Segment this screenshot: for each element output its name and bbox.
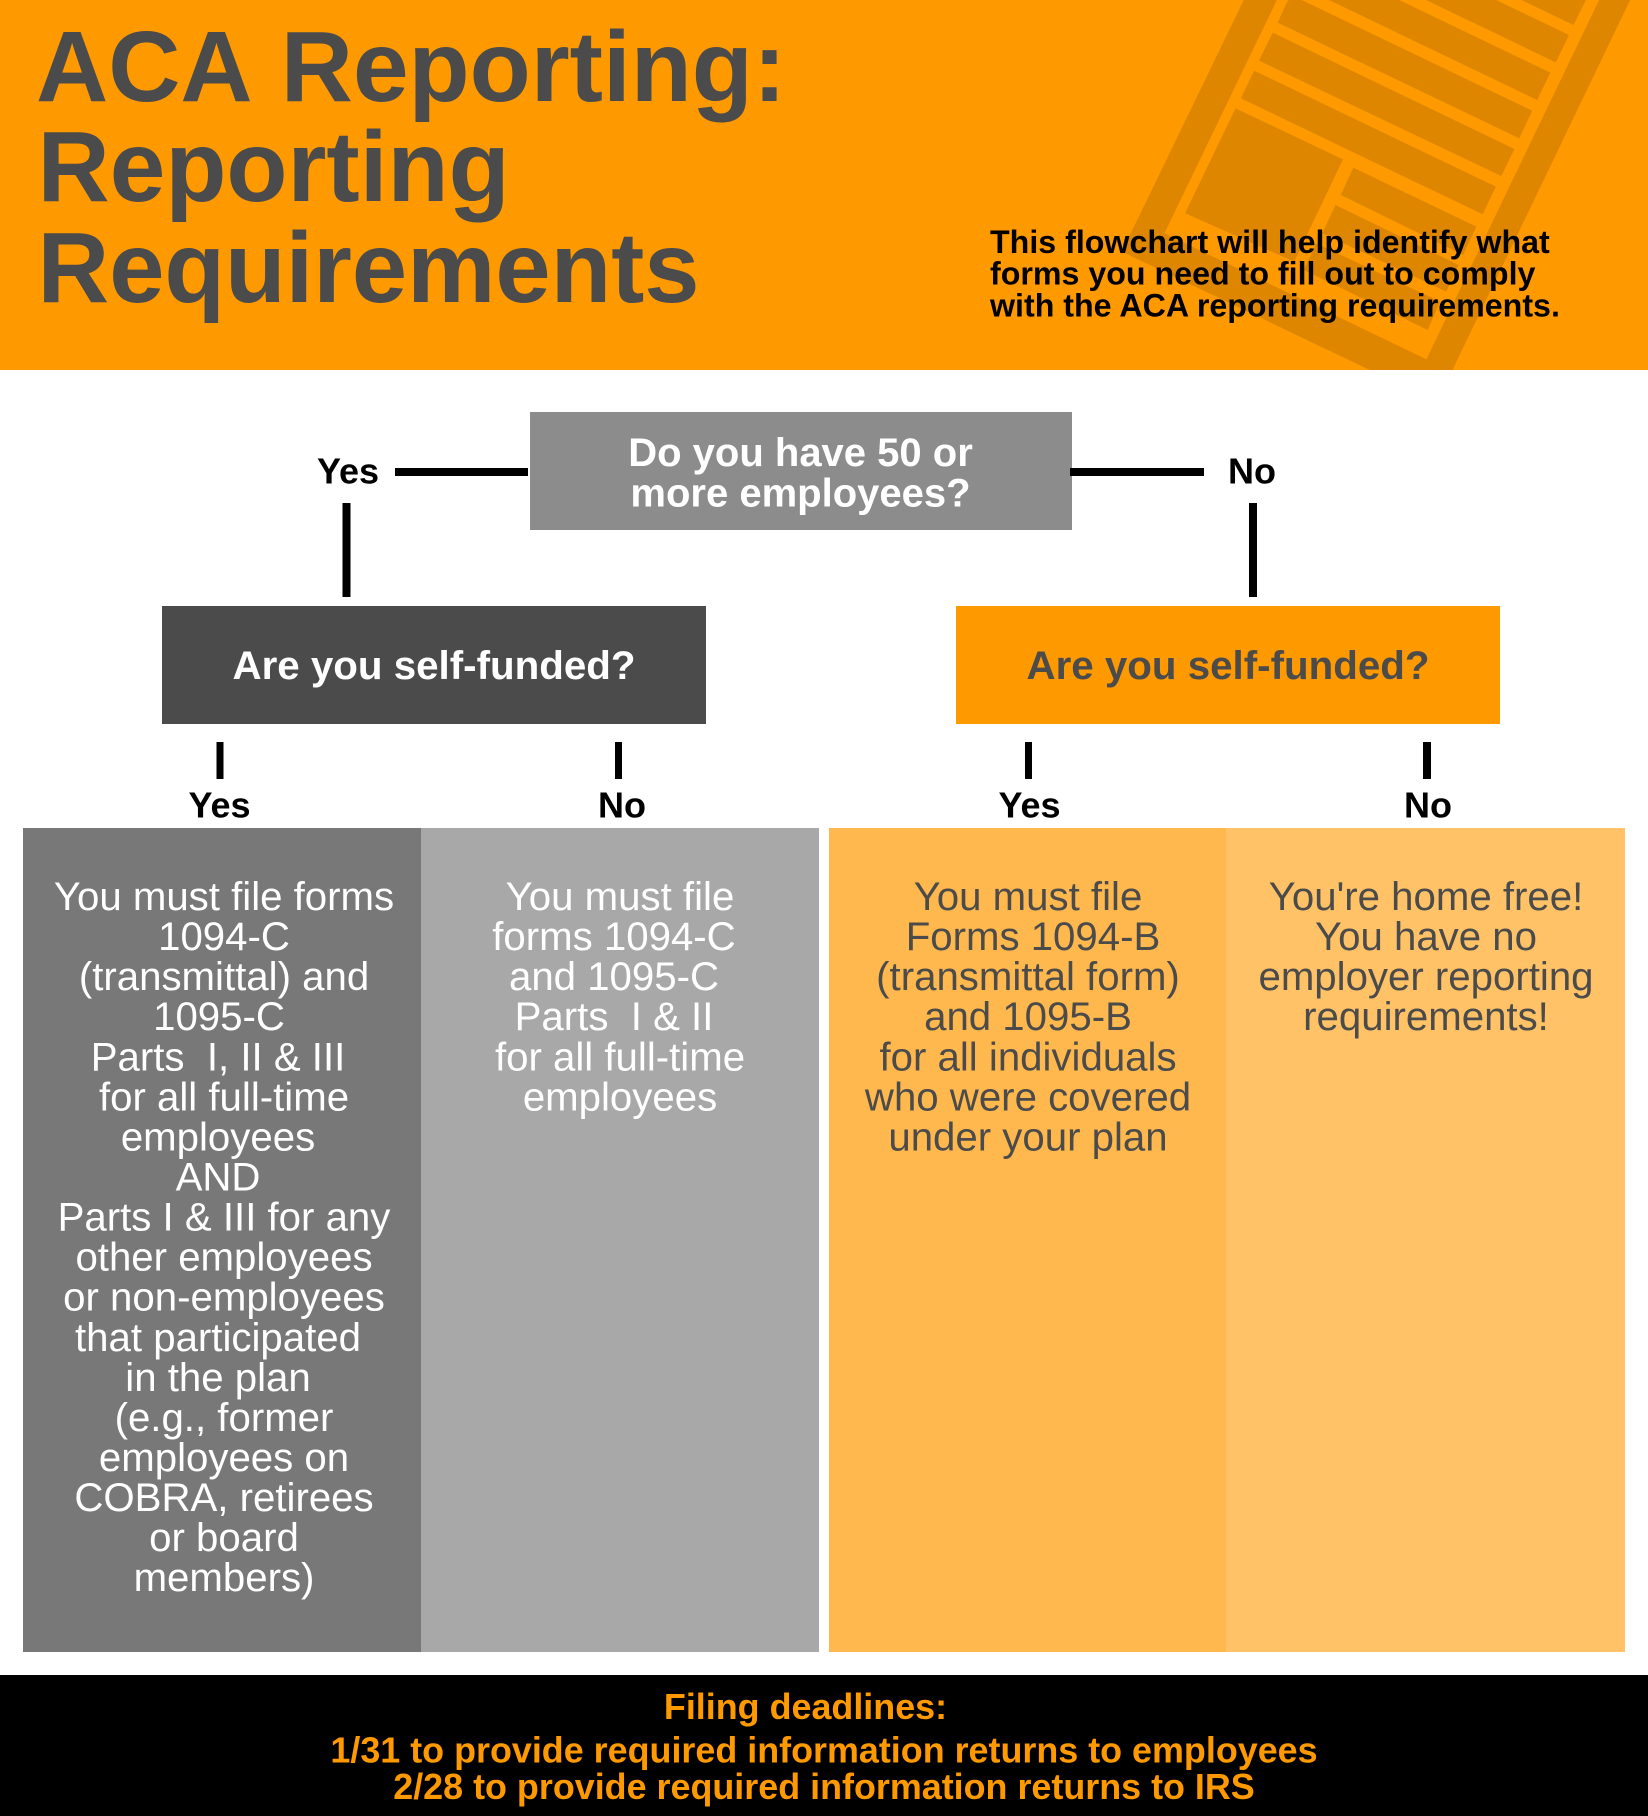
panel: self-funded large employer: 1095-C [153,994,285,1039]
icon: tilted document [1122,0,1630,370]
panel: not self-funded small employer: You're home free! [1269,874,1583,919]
intro text [989,224,1560,324]
panel: self-funded large employer: You must file forms [54,874,394,919]
panel: self-funded large employer: other employees [75,1235,373,1280]
title: Requirements [38,212,700,324]
panel: self-funded small employer: and 1095-B [924,994,1132,1039]
connector: left yes tick [216,742,224,779]
panel: self-funded large employer: employees on [99,1435,349,1480]
label: left Yes: Yes [188,784,251,826]
panel: self-funded small employer: for all individuals [879,1034,1177,1079]
question: self-funded, left [162,606,706,724]
panel: not self-funded large employer: You must file [506,874,734,919]
panel: self-funded small employer: who were covered [864,1074,1191,1119]
panel: self-funded large employer: employees [121,1114,315,1159]
panel: self-funded large employer: COBRA, retirees [74,1475,374,1520]
panel: not self-funded large employer: and 1095-C [509,954,719,999]
panel: not self-funded small employer: requirements! [1303,994,1549,1039]
label: right Yes: Yes [998,784,1061,826]
connector: right no tick [1423,742,1431,779]
question: 50 or more employees [530,412,1072,530]
intro text: forms you need to fill out to comply [990,256,1536,292]
panel: not self-funded small employer: You have no [1315,914,1537,959]
panel: self-funded small employer: You must file [914,874,1142,919]
connector: top yes horizontal [395,468,528,476]
label: top Yes: Yes [317,450,379,492]
connector: left no tick [615,742,622,779]
panel: header [0,0,1648,370]
panel: filing deadlines footer [0,1675,1648,1816]
panel: self-funded large employer: or board [149,1515,299,1560]
panel: not self-funded large employer: forms 1094-C [492,914,736,959]
panel: not self-funded large employer [421,828,819,1652]
panel: self-funded large employer: members) [134,1555,314,1600]
panel: not self-funded large employer: employees [523,1074,717,1119]
panel: not self-funded small employer: employer reporting [1258,954,1594,999]
panel: self-funded large employer: Parts I, II & III [91,1034,345,1079]
panel: self-funded large employer: AND [176,1154,260,1200]
panel: not self-funded large employer: Parts I & II [515,994,713,1039]
panel: self-funded large employer: or non-employees [63,1275,385,1320]
panel: self-funded large employer: (transmittal) and [79,954,369,999]
panel: self-funded large employer: in the plan [125,1355,311,1400]
intro text: with the ACA reporting requirements. [989,288,1560,324]
panel: filing deadlines footer: 2/28 to provide required information returns to IRS [393,1767,1255,1807]
title [36,11,786,324]
panel: self-funded large employer [23,828,421,1652]
question: self-funded, left: Are you self-funded? [232,643,636,688]
question: 50 or more employees: more employees? [630,472,971,516]
title: ACA Reporting: [36,11,786,123]
label: left No: No [598,784,646,826]
connector: right yes tick [1025,742,1032,779]
panel: filing deadlines footer: Filing deadlines: [664,1687,947,1727]
label: right No: No [1404,784,1452,826]
panel: self-funded small employer: under your plan [888,1114,1168,1159]
question: self-funded, right: Are you self-funded? [1026,643,1430,688]
intro text: This flowchart will help identify what [990,224,1550,260]
panel: not self-funded small employer [1226,828,1625,1652]
panel: self-funded small employer: Forms 1094-B [906,914,1160,959]
label: top No: No [1228,450,1276,492]
question: self-funded, right [956,606,1500,724]
panel: self-funded large employer: that participated [75,1315,361,1360]
connector: top yes vertical [342,503,350,597]
title: Reporting [38,111,510,223]
connector: top no vertical [1249,503,1257,597]
panel: self-funded large employer: for all full-time [99,1074,349,1119]
panel: self-funded large employer: Parts I & III for any [58,1195,391,1240]
panel: self-funded large employer: 1094-C [158,914,290,959]
connector: top no horizontal [1070,468,1204,476]
panel: self-funded large employer: (e.g., former [115,1395,333,1440]
panel: self-funded small employer: (transmittal form) [876,954,1180,999]
question: 50 or more employees: Do you have 50 or [628,431,973,475]
panel: filing deadlines footer: 1/31 to provide required information returns to employees [330,1731,1318,1771]
panel: self-funded small employer [829,828,1226,1652]
panel: not self-funded large employer: for all full-time [495,1034,745,1079]
